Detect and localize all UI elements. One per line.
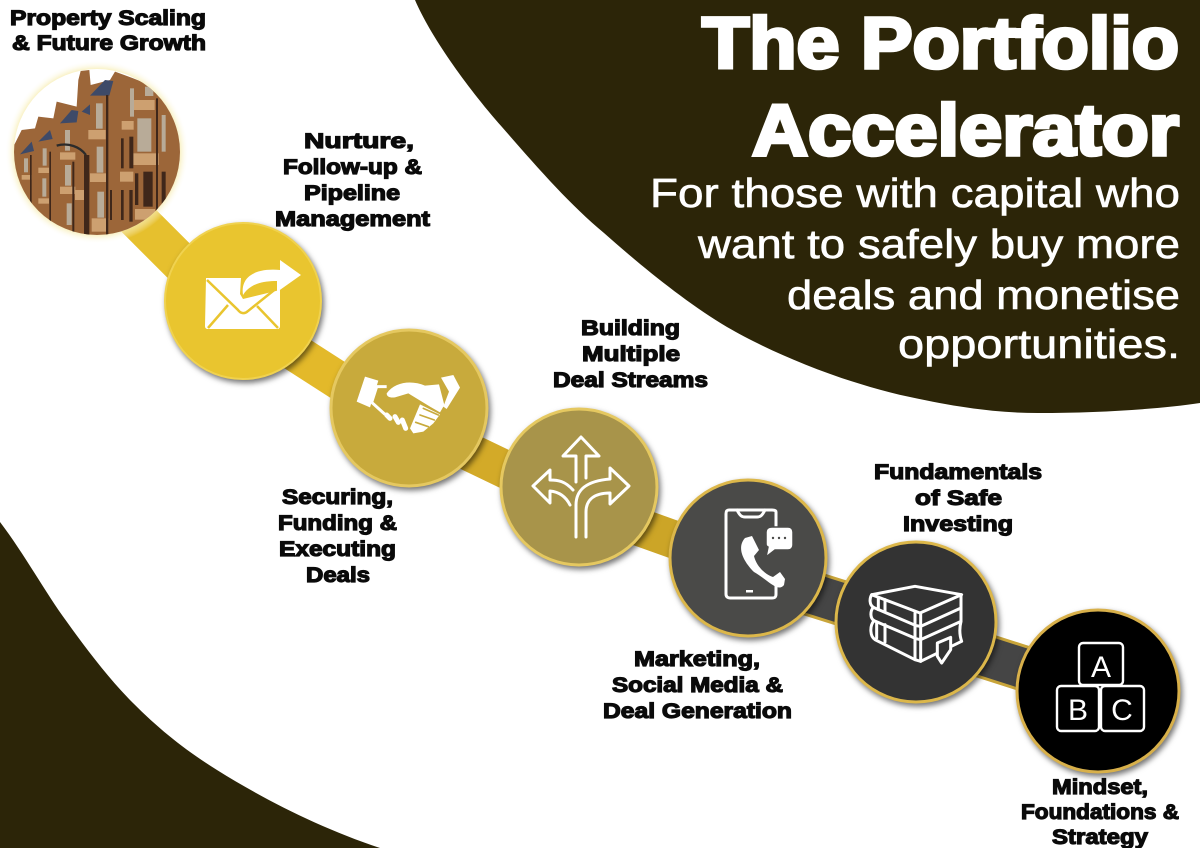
label: building deal streams: Building (581, 317, 680, 340)
label: securing funding (278, 486, 397, 587)
title: Accelerator (752, 91, 1179, 171)
label: nurture: Nurture, (304, 130, 414, 153)
step 3 circle: phone icon (670, 480, 826, 636)
icon: handshake (357, 375, 460, 433)
label: nurture: Management (275, 208, 430, 231)
label: fundamentals: Fundamentals (874, 461, 1042, 484)
step 6 circle: mail icon (165, 223, 321, 379)
icon: alphabet blocks: A (1091, 651, 1111, 684)
label: building deal streams: Deal Streams (553, 369, 708, 392)
label: property scaling (10, 7, 206, 55)
label: securing funding: Executing (279, 538, 396, 561)
step 4 circle: branching arrows icon (501, 409, 657, 565)
label: property scaling: Property Scaling (10, 7, 206, 30)
icon: alphabet blocks (1057, 643, 1144, 731)
top-right dark background shape (415, 0, 1200, 413)
label: property scaling: & Future Growth (12, 32, 206, 55)
icon: stacked books (870, 586, 962, 663)
icon: smartphone with call and chat (726, 510, 793, 598)
label: marketing: Social Media & (612, 674, 783, 697)
label: marketing (603, 648, 792, 723)
icon: envelope with arrow (205, 260, 301, 329)
label: securing funding: Funding & (278, 512, 397, 535)
label: nurture: Pipeline (304, 182, 400, 205)
icon: three-way arrows (533, 437, 629, 537)
label: securing funding: Securing, (282, 486, 393, 509)
subtitle: For those with capital who (650, 170, 1180, 216)
label: fundamentals: Investing (903, 513, 1013, 536)
subtitle: want to safely buy more (697, 221, 1180, 267)
label: fundamentals: of Safe (915, 487, 1002, 510)
label: building deal streams: Multiple (582, 343, 680, 366)
label: building deal streams (553, 317, 708, 392)
label: mindset: Mindset, (1052, 776, 1148, 799)
title: The Portfolio (702, 4, 1179, 84)
connector path between steps (125, 207, 1060, 680)
bottom-left dark background shape (0, 522, 380, 848)
label: mindset: Foundations & (1021, 801, 1179, 824)
label: securing funding: Deals (306, 564, 370, 587)
label: mindset (1021, 776, 1179, 848)
subtitle: opportunities. (898, 321, 1180, 367)
label: marketing: Deal Generation (603, 700, 792, 723)
label: nurture: Follow-up & (283, 156, 422, 179)
subtitle (650, 170, 1180, 367)
step 7 photo: terraced sandstone houses (5, 60, 189, 244)
icon: alphabet blocks: B (1068, 694, 1088, 727)
step 1 circle: ABC blocks icon (1017, 610, 1179, 772)
icon: alphabet blocks: C (1111, 694, 1133, 727)
subtitle: deals and monetise (787, 272, 1180, 318)
label: marketing: Marketing, (634, 648, 760, 671)
step 2 circle: books icon (836, 542, 996, 702)
step 5 circle: handshake icon (331, 330, 487, 486)
title (702, 4, 1179, 171)
label: fundamentals (874, 461, 1042, 536)
label: nurture (275, 130, 430, 231)
